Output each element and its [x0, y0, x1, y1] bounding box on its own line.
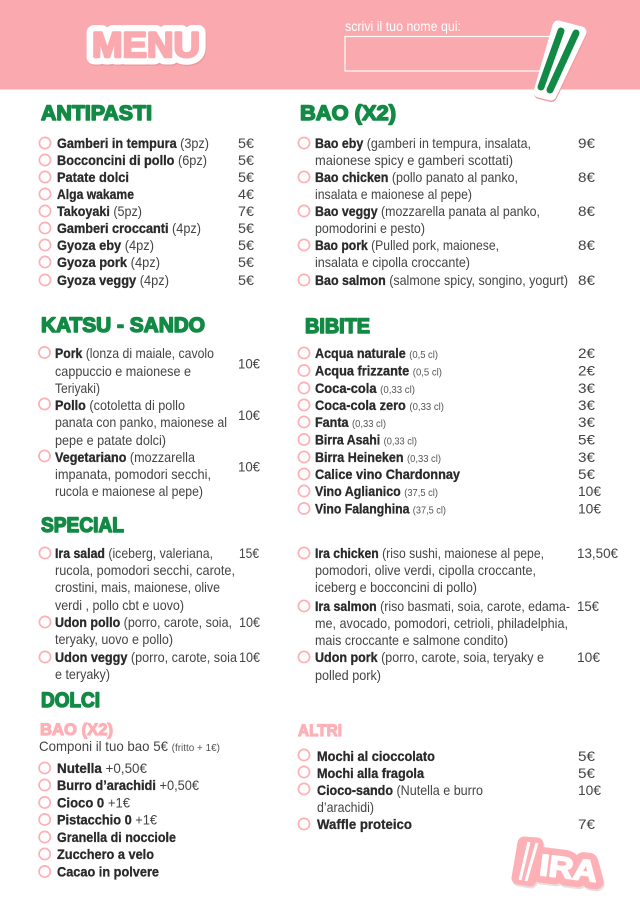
panel: special left [39, 514, 260, 682]
row: Vino Falanghina (37,5 cl) [315, 500, 446, 516]
row: Gyoza veggy (4pz) [57, 272, 169, 288]
row: Gamberi croccanti (4pz) [57, 220, 201, 236]
row: 5€ [238, 237, 254, 253]
item: vegetariano [39, 449, 260, 499]
panel: special right [298, 545, 618, 683]
row [298, 432, 595, 448]
row: 3€ [578, 397, 595, 413]
item: pork: Pork (lonza di maiale, cavolo [55, 345, 214, 361]
item: udon pollo [39, 614, 260, 647]
row: Calice vino Chardonnay [315, 466, 460, 482]
item: bao veggy: Bao veggy (mozzarella panata al panko, [315, 203, 540, 219]
row: 5€ [578, 432, 595, 448]
row [39, 220, 254, 236]
heading: katsu sando: KATSU - SANDO [41, 314, 205, 337]
logo: IRA sticker [518, 842, 600, 891]
item: pork [39, 345, 260, 396]
title: MENU sticker: MENU [92, 26, 200, 65]
row: Coca-cola zero (0,33 cl) [315, 397, 444, 413]
row [298, 345, 595, 361]
row [39, 237, 254, 253]
item: bao veggy [298, 203, 595, 236]
row: Gyoza eby (4pz) [57, 237, 154, 253]
row: Alga wakame [57, 186, 134, 202]
panel: dolci bao [39, 689, 220, 880]
item: bao pork: insalata e cipolla croccante) [315, 254, 470, 270]
row [298, 483, 601, 499]
item: bao chicken: 8€ [578, 169, 595, 185]
row: 3€ [578, 414, 595, 430]
item: ira salmon [298, 598, 599, 648]
row [298, 397, 595, 413]
row: 5€ [578, 748, 595, 764]
row: Gyoza pork (4pz) [57, 254, 160, 270]
item: ira salad: 15€ [239, 545, 259, 561]
item: ira salmon: 15€ [577, 598, 599, 614]
item: pollo: Pollo (cotoletta di pollo [55, 397, 185, 413]
title: MENU sticker: MENU [92, 26, 200, 65]
item: ira chicken: 13,50€ [577, 545, 618, 561]
panel: bao x2 [298, 102, 595, 288]
item: udon pork [298, 649, 600, 683]
row: Gamberi in tempura (3pz) [57, 135, 209, 151]
header band [0, 0, 640, 90]
icon: chopsticks [539, 26, 582, 96]
row [298, 414, 595, 430]
item: ira salad: Ira salad (iceberg, valeriana, [55, 545, 213, 561]
row: Cacao in polvere [57, 864, 159, 880]
row: Cioco 0 +1€ [57, 794, 130, 810]
row: Nutella +0,50€ [57, 760, 147, 776]
row: 5€ [238, 152, 254, 168]
item: vegetariano: rucola e maionese al pepe) [55, 483, 203, 499]
panel: katsu sando [39, 314, 260, 499]
item: udon pollo: 10€ [239, 614, 260, 630]
item: vegetariano: impanata, pomodori secchi, [55, 466, 211, 482]
item: bao veggy: pomodorini e pesto) [315, 220, 425, 236]
logo: IRA sticker: IRA [538, 849, 599, 889]
item: ira salad: verdi , pollo cbt e uovo) [55, 597, 184, 613]
item: ira salad: rucola, pomodori secchi, carote, [55, 562, 235, 578]
item: vegetariano: 10€ [238, 458, 260, 474]
item: bao chicken [298, 169, 595, 202]
row: Patate dolci [57, 169, 129, 185]
row: Acqua naturale (0,5 cl) [315, 345, 438, 361]
item: pollo: 10€ [238, 407, 260, 423]
row: 7€ [238, 203, 254, 219]
row: 5€ [238, 272, 254, 288]
row [39, 272, 254, 288]
row: 2€ [578, 345, 595, 361]
item: udon veggy: e teryaky) [55, 666, 110, 682]
name field label: scrivi il tuo nome qui: [345, 18, 461, 34]
row [298, 380, 595, 396]
row: Mochi alla fragola [317, 765, 424, 781]
row [298, 765, 595, 781]
subheading: bao x2: BAO (X2) [40, 720, 113, 739]
item: udon pork: Udon pork (porro, carote, soia, teryaky e [315, 649, 544, 665]
panel: antipasti [39, 102, 254, 288]
item: bao eby: Bao eby (gamberi in tempura, insalata, [315, 135, 531, 151]
heading: dolci: DOLCI [41, 689, 100, 712]
row [39, 254, 254, 270]
row: Zucchero a velo [57, 846, 154, 862]
row [39, 169, 254, 185]
heading: bibite: BIBITE [305, 315, 370, 338]
name input box [345, 36, 557, 71]
item: ira salmon: Ira salmon (riso basmati, soia, carote, edama- [315, 598, 570, 614]
item: bao pork [298, 237, 595, 270]
item: bao veggy: 8€ [578, 203, 595, 219]
row: 10€ [578, 500, 601, 516]
row: Granella di nocciole [57, 829, 176, 845]
row [298, 466, 595, 482]
row: 3€ [578, 380, 595, 396]
row: 5€ [238, 254, 254, 270]
subheading: altri: ALTRI [298, 721, 342, 740]
row [298, 500, 601, 516]
item: vegetariano: Vegetariano (mozzarella [55, 449, 195, 465]
row: Acqua frizzante (0,5 cl) [315, 362, 442, 378]
title: MENU sticker: MENU [93, 28, 201, 66]
item: bao eby: maionese spicy e gamberi scottati) [315, 152, 513, 168]
item: bao eby: 9€ [578, 135, 595, 151]
panel: bibite [298, 315, 601, 516]
intro text: Componi il tuo bao 5€ (fritto + 1€) [39, 738, 220, 754]
item: bao salmon: Bao salmon (salmone spicy, songino, yogurt) [315, 272, 568, 288]
row: 5€ [238, 135, 254, 151]
item: pork: Teriyaki) [55, 380, 100, 396]
item: pollo: panata con panko, maionese al [55, 414, 227, 430]
item: bao salmon: 8€ [578, 272, 595, 288]
logo: IRA sticker: IRA [539, 851, 600, 891]
row [39, 203, 254, 219]
row: 10€ [578, 782, 601, 798]
item: udon pork: 10€ [577, 649, 600, 665]
heading: antipasti: ANTIPASTI [41, 102, 152, 125]
row [298, 362, 595, 378]
row: 10€ [578, 483, 601, 499]
heading: special: SPECIAL [41, 514, 124, 537]
item: ira salmon: mais croccante e salmone condito) [315, 632, 508, 648]
row: Cioco-sando (Nutella e burro [317, 782, 483, 798]
row: 5€ [578, 466, 595, 482]
row: Pistacchio 0 +1€ [57, 812, 157, 828]
row: Takoyaki (5pz) [57, 203, 142, 219]
item: bao eby [298, 135, 595, 168]
row: 4€ [238, 186, 254, 202]
item: udon pollo: Udon pollo (porro, carote, soia, [55, 614, 232, 630]
item: pork: 10€ [238, 356, 260, 372]
row [298, 748, 595, 764]
row: 5€ [238, 169, 254, 185]
item: udon veggy [39, 649, 260, 682]
row: 2€ [578, 362, 595, 378]
heading: bao x2: BAO (X2) [300, 102, 396, 125]
row [298, 782, 601, 815]
item: bao chicken: insalata e maionese al pepe) [315, 186, 472, 202]
item: pollo [39, 397, 260, 448]
item: pork: cappuccio e maionese e [55, 363, 191, 379]
row: Birra Heineken (0,33 cl) [315, 449, 441, 465]
row [298, 816, 595, 832]
item: ira salad [39, 545, 259, 613]
item: bao pork: 8€ [578, 237, 595, 253]
row: 7€ [578, 816, 595, 832]
logo: IRA sticker: IRA [538, 849, 599, 889]
item: ira chicken: Ira chicken (riso sushi, maionese al pepe, [315, 545, 544, 561]
item: ira chicken: iceberg e bocconcini di pollo) [315, 579, 477, 595]
row: d’arachidi) [317, 799, 374, 815]
item: pollo: pepe e patate dolci) [55, 432, 166, 448]
row: 3€ [578, 449, 595, 465]
panel: dolci altri [298, 721, 601, 832]
row: Birra Asahi (0,33 cl) [315, 432, 417, 448]
item: ira chicken: pomodori, olive verdi, cipolla croccante, [315, 562, 536, 578]
row: Coca-cola (0,33 cl) [315, 380, 415, 396]
row: Fanta (0,33 cl) [315, 414, 386, 430]
item: udon pork: polled pork) [315, 667, 381, 683]
item: udon veggy: Udon veggy (porro, carote, soia [55, 649, 237, 665]
row: 5€ [238, 220, 254, 236]
row: Burro d’arachidi +0,50€ [57, 777, 199, 793]
row [298, 449, 595, 465]
item: udon veggy: 10€ [239, 649, 260, 665]
item: ira salmon: me, avocado, pomodori, cetrioli, philadelphia, [315, 615, 568, 631]
row [39, 186, 254, 202]
row: Waffle proteico [317, 816, 412, 832]
row: 5€ [578, 765, 595, 781]
row: Mochi al cioccolato [317, 748, 435, 764]
item: bao chicken: Bao chicken (pollo panato al panko, [315, 169, 518, 185]
row: Vino Aglianico (37,5 cl) [315, 483, 438, 499]
row: Bocconcini di pollo (6pz) [57, 152, 207, 168]
item: ira salad: crostini, mais, maionese, olive [55, 579, 220, 595]
item: bao pork: Bao pork (Pulled pork, maionese, [315, 237, 499, 253]
item: udon pollo: teryaky, uovo e pollo) [55, 631, 173, 647]
item: ira chicken [298, 545, 618, 595]
